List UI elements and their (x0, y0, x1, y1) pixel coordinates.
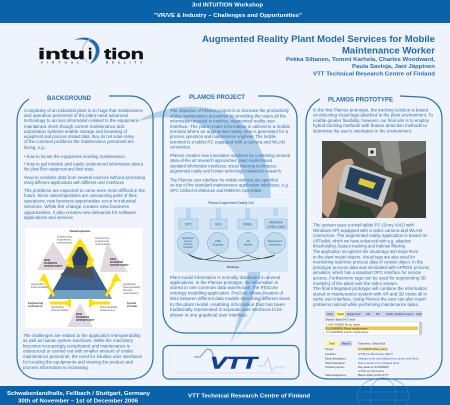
screenshot: maintenance user interface: LCV000091 Main pump (358, 347, 388, 351)
screenshot: maintenance user interface: Day dead on 31/10/0006 (358, 365, 389, 369)
text block: project objective (170, 108, 291, 193)
VTT wordmark: VTT (210, 354, 259, 372)
diagram: plamos architecture: Plamos Augmented Reality GUI (208, 201, 254, 205)
diagram: stakeholders triangle: Interoperability (100, 305, 118, 309)
diagram: plamos architecture: Drawings (213, 242, 224, 246)
text block: challenges: as well as human system interfaces. While the machinery (23, 338, 134, 343)
text block: background intro: applications and services (24, 215, 74, 220)
text block: plant model: Plant model information is normally distributed in several (170, 275, 280, 280)
footer bar (0, 378, 450, 405)
text block: project objective: The objective of Plamos project is to increase the productivity (170, 108, 290, 113)
logo: intuition: VIRTUAL (41, 60, 79, 64)
text block: background intro: technology to access information related to the equipment (24, 118, 139, 123)
diagram: stakeholders triangle: Outsourcing (95, 236, 110, 240)
diagram: stakeholders triangle (25, 228, 142, 328)
diagram: stakeholders triangle: NEW (110, 257, 117, 261)
screenshot: maintenance user interface: Task assigned to: (325, 373, 347, 377)
screenshot: maintenance user interface: A/708 1st Mezzanine Wall 3 (358, 352, 393, 356)
diagram: plamos architecture: Process (184, 243, 193, 246)
diagram: stakeholders triangle: maintenance (57, 240, 73, 244)
screenshot: maintenance user interface: Report (342, 342, 351, 346)
text block: background intro: • how to get intuitive and easily understood information about (24, 162, 144, 166)
text block: system description: simulator, which has a standard OPC interface for remote (313, 270, 422, 275)
heading: plamos prototype: PLAMOS PROTOTYPE (328, 98, 393, 104)
screenshot: maintenance user interface: 1 AAA-000081 Pump repair (326, 322, 360, 326)
screenshot: maintenance user interface: Chat (416, 312, 422, 316)
text block: background intro: maintained. Even though current maintenance and (24, 124, 125, 129)
text block: background intro: equipment and process related data, they do not solve many (24, 134, 135, 139)
text block: system description: stored in maintenance system with AR and 3D views all in (313, 291, 428, 296)
screenshot: maintenance user interface: Task (329, 342, 335, 346)
heading: plamos project: PLAMOS PROJECT (189, 95, 245, 101)
diagram: plamos architecture: 3D (246, 239, 250, 243)
text block: system description: thresholding, feature tracking and Kalman filtering. (313, 244, 406, 249)
authors: Pekka Siltanen, Tommi Karhela, Charles Woodward, (286, 57, 436, 63)
logo: intuition: tion (104, 46, 144, 63)
text block: system description (313, 222, 430, 307)
text block: system description: problems noticed while performing maintenance tasks. (313, 302, 419, 307)
main title: Maintenance Worker (342, 46, 435, 56)
text block: project objective: Plamos creates new innovative solutions by combining several (170, 153, 290, 158)
text block: plant model: links between different data models describing different views (170, 296, 291, 301)
diagram: stakeholders triangle: NEW (44, 258, 51, 262)
text block: plant model: shown in one graphical user interface. (170, 312, 248, 318)
diagram: stakeholders triangle: engineering (57, 238, 72, 242)
diagram: plamos architecture: Automation (182, 237, 195, 240)
diagram: stakeholders triangle: BUSINESS (44, 261, 58, 265)
diagram: stakeholders triangle: Outsourcing (100, 308, 115, 312)
diagram: plamos architecture: MIMOSA (269, 220, 283, 224)
diagram: stakeholders triangle: OPPORTUNITY (110, 263, 129, 267)
icon: pulse line (194, 349, 216, 362)
footer: venue and date (7, 391, 151, 404)
main title (202, 34, 435, 56)
diagram: stakeholders triangle: interoperability (31, 285, 49, 289)
diagram: stakeholders triangle: maintenance (95, 242, 111, 246)
diagram: plamos architecture: SVG (215, 222, 222, 226)
text block: background intro (24, 108, 146, 220)
screenshot: maintenance user interface: Before Date 04.09.13:?? (358, 373, 389, 377)
screenshot: maintenance user interface: Fault description: (325, 356, 347, 360)
text block: background intro: •how to combine data from several sources without accessing (24, 175, 146, 180)
screenshot: maintenance user interface: 3D (376, 312, 380, 316)
text block: plant model: applications. In the Plamos prototype, the information is (170, 280, 279, 285)
panel: vtt logo (163, 346, 299, 379)
diagram: stakeholders triangle: maintenance (123, 291, 139, 295)
text block: project objective: information needed in intuitive, augmented reality user (170, 119, 276, 124)
diagram: stakeholders triangle: Engineering (28, 301, 43, 305)
text block: project objective: augmented reality and human technology interaction research. (170, 169, 282, 174)
text block: system description: access. Furthermore tags can be used for augmenting 3D (313, 276, 426, 280)
text block: system description: The application recognizes the visual tags and maps them (313, 249, 418, 254)
screenshot: maintenance user interface: A/708 1st Mezzanine (358, 369, 385, 373)
text block: project objective: terminal is a tablet PC equipped with a camera and WLAN (170, 139, 285, 144)
screenshot: maintenance user interface: Contact person: (325, 365, 345, 369)
text block: background intro: the plant floor equipment and their state, (24, 166, 94, 172)
text block: challenges (23, 333, 143, 370)
text block: project objective: The Plamos user interface for mobile workers are specified (170, 178, 279, 182)
text block: challenges: maintenance personnel, the need for intuitive user interfaces (23, 354, 143, 359)
screenshot: maintenance user interface: AR (366, 312, 370, 316)
footer: venue and date: 30th of November – 1st of December 2006 (18, 398, 138, 404)
main title: Augmented Reality Plant Model Services for Mobile (202, 34, 435, 45)
screenshot: maintenance user interface: Guide (386, 312, 394, 316)
text block: tracking: determine the user's orientation in the environment. (313, 128, 412, 133)
text block: background intro: and operation personnel of the plant need advanced (24, 113, 129, 118)
text block: background intro: automation systems enable storage and browsing of (24, 129, 128, 134)
text block: background intro: Complexity of an industrial plant is so huge that maintenance (24, 108, 144, 113)
text block: system description: to the plant model objects. Visual tags are also used for (313, 254, 415, 259)
text block: project objective: OPC Unified Architecture and MIMOSA OpenO&M. (170, 188, 262, 193)
text block: tracking (313, 108, 434, 133)
diagram: stakeholders triangle: NEW (76, 312, 83, 316)
screenshot: maintenance user interface: 3 LCV000091 Check maintenance (326, 330, 369, 334)
panel: plamos project (163, 95, 297, 333)
text block: system description: prototype process data was simulated with APROS process (313, 265, 430, 270)
text block: plant model: stored in one common data warehouse, the ProCore (170, 285, 279, 290)
logo: intuition: intu (38, 46, 85, 63)
diagram: stakeholders triangle: Application (123, 282, 137, 286)
screenshot: maintenance user interface: Location: (325, 352, 337, 356)
screenshot: maintenance user interface: Task description: (325, 361, 346, 365)
diagram: plamos architecture: OPEN O&M (267, 225, 285, 229)
text block: tracking: hybrid tracking methods with feature detection methods to (313, 123, 428, 128)
diagram: plamos architecture: ProCore (227, 265, 239, 269)
screenshot: maintenance user interface: Shared: Back 04.3 Units (325, 318, 356, 322)
photo: tablet in hand (322, 141, 426, 218)
authors: VTT Technical Research Centre of Finland (313, 71, 435, 77)
diagram: plamos architecture: Maintenance (268, 239, 283, 243)
text block: system description: The system uses a small tablet PC (Sony VAIO with (313, 222, 415, 228)
screenshot: maintenance user interface (324, 311, 422, 377)
workshop title: 3rd INTUITION Workshop (192, 2, 264, 8)
diagram: stakeholders triangle: provider (127, 304, 137, 308)
diagram: plamos architecture: Models (244, 242, 253, 246)
text block: challenges: becomes increasingly complicated and maintenance is (23, 343, 131, 348)
background swoosh (136, 107, 273, 344)
text block: project objective: state-of-the art research approaches: plant model based (170, 158, 273, 163)
diagram: stakeholders triangle: interoperability (51, 308, 69, 312)
screenshot: maintenance user interface: Strange noise and leaking from pump feed More.. (358, 356, 420, 360)
diagram: stakeholders triangle: OPPORTUNITY (44, 264, 63, 268)
text block: challenges: The challenges are related to the application interoperability, (23, 333, 141, 338)
text block: plant model (170, 275, 291, 318)
text block: project objective: connection. (170, 145, 191, 150)
footer: organisation: VTT Technical Research Centre of Finland (188, 393, 310, 399)
screenshot: maintenance user interface: Pump needs to be changed More.. (358, 361, 401, 365)
diagram: stakeholders triangle: Owner/operator (70, 229, 91, 233)
text block: project objective: terminal where an augmented reality view is generated for a (170, 129, 289, 134)
text block: background intro: opportunities, it also creates new demands for software (24, 210, 137, 215)
text block: background intro: services. While the change creates new business (24, 204, 130, 209)
diagram: stakeholders triangle: contractors (28, 304, 43, 308)
diagram: stakeholders triangle: System (127, 301, 137, 305)
screenshot: maintenance user interface: Target: (325, 347, 334, 351)
diagram: plamos architecture: VRML (243, 222, 252, 226)
text block: system description: same user interface. Using Plamos the user can also report (313, 297, 427, 302)
text block: project objective: standard information interfaces, visual indexing techniques, (170, 163, 277, 168)
diagram: stakeholders triangle: engineering (95, 239, 110, 243)
text block: plant model: to the plant model, enabling information that has been (170, 302, 286, 307)
text block: system description: The final integrated prototype will combine the information (313, 286, 428, 291)
authors (286, 57, 436, 77)
text block: challenges: for locating the equipments and viewing the product and (23, 360, 134, 364)
diagram: stakeholders triangle: OPPORTUNITY (76, 318, 95, 322)
diagram: plamos architecture: OPC (185, 222, 193, 226)
text block: background intro: • how to locate the equipment needing maintenance, (24, 154, 126, 159)
text block: challenges: outsourced or carried out with smaller amount of onsite (23, 348, 134, 354)
diagram: stakeholders triangle: interoperability (123, 285, 141, 289)
panel: background (17, 96, 153, 379)
diagram: stakeholders triangle: Remote (123, 288, 133, 292)
panel: plamos prototype (306, 96, 442, 379)
header bar (0, 0, 450, 23)
diagram: stakeholders triangle: Application (51, 305, 65, 309)
diagram: stakeholders triangle: Application (31, 282, 45, 286)
heading: background: BACKGROUND (47, 96, 92, 102)
diagram: stakeholders triangle: BUSINESS (110, 260, 124, 264)
logo: intuition: REALITY (106, 60, 142, 64)
text block: system description: monitoring real-time process data of certain object, in the (313, 260, 424, 265)
text block: background intro: operations, new business opportunities occur in industrial (24, 198, 136, 204)
logo: intuition: i (88, 46, 92, 63)
text block: background intro: many different applications with different user interfaces (24, 180, 125, 185)
screenshot: maintenance user interface: Task Area: Select Edit (358, 342, 385, 346)
text block: system description: model(s) of the plant over the video stream. (313, 281, 398, 286)
logo: intuition (38, 38, 144, 64)
diagram: plamos architecture: information (269, 242, 282, 246)
text block: project objective: interface. The plant model information is utilised in a mobile (170, 124, 291, 129)
text block: system description: connection. The augmented reality application is based on (313, 233, 428, 238)
screenshot: maintenance user interface: 2 LCV000091 Pump replacement (326, 326, 368, 330)
authors: Paula Savioja, Jani Jäppinen (352, 64, 436, 70)
text block: challenges: process information is increasing. (23, 365, 89, 370)
text block: plant model: ontology modelling application. ProCore allows creation of (170, 290, 284, 296)
text block: system description: ARToolkit, which we have enhanced with e.g. adaptive (313, 238, 412, 243)
diagram: plamos architecture: P&ID (215, 239, 221, 243)
text block: project objective: process operation and maintenance engineer. The mobile (170, 134, 277, 139)
diagram: stakeholders triangle: BUSINESS (76, 315, 90, 319)
text block: system description: Windows XP) equipped with a video camera and WLAN (313, 228, 422, 233)
text block: tracking: enable greater flexibility, however, our final aim is to employ (313, 118, 430, 123)
screenshot: maintenance user interface: Problem report (395, 312, 414, 316)
text block: project objective: of the maintenance personnel by providing the users all the (170, 113, 287, 118)
text block: tracking: on detecting visual tags attached to the plant environment. To (313, 113, 434, 118)
footer: venue and date: Schwabenlandhalle, Fellbach / Stuttgart, Germany (7, 391, 151, 397)
diagram: plamos architecture: simulator (183, 246, 193, 249)
screenshot: maintenance user interface: Tasks (337, 312, 345, 316)
text block: background intro: The problems are expected to come even more difficult in the (24, 188, 146, 193)
diagram: plamos architecture: system (184, 240, 192, 243)
diagram: stakeholders triangle: Outsourcing (57, 234, 72, 238)
screenshot: maintenance user interface: Equipment (347, 312, 361, 316)
text block: project objective: on top of the standard maintenance application interfaces, e.g. (170, 183, 289, 188)
text block: tracking: In the first Plamos prototype, the tracking solution is based (313, 108, 429, 112)
workshop subtitle: "VR/VE & Industry – Challenges and Opportunities" (154, 13, 303, 19)
text block: background intro: facing, e.g.: (24, 145, 46, 150)
text block: background intro: future. Since owner/operators are outsourcing parts of their (24, 193, 138, 198)
screenshot: maintenance user interface: Start (327, 312, 333, 316)
diagram: plamos architecture (174, 198, 288, 272)
text block: background intro: of the common problems the maintenance personnel are (24, 139, 135, 144)
text block: plant model: traditionally represented in separate user interfaces to be (170, 307, 283, 312)
